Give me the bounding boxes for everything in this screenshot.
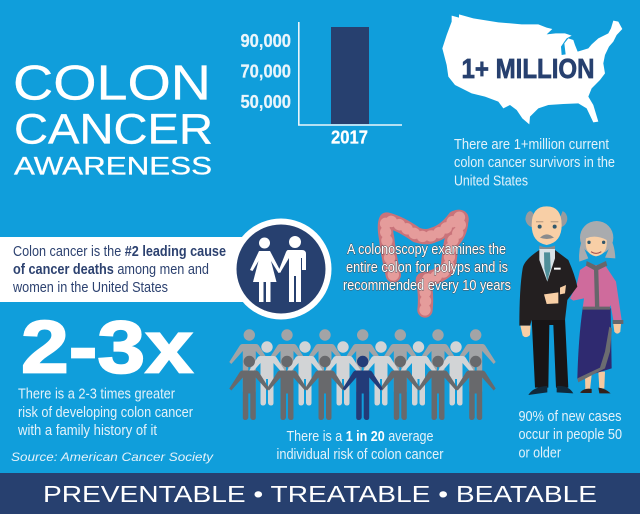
leading cause banner: women in the United States <box>12 279 168 296</box>
source: Source: American Cancer Society <box>11 450 214 464</box>
icon: woman and man <box>250 236 306 302</box>
risk text: individual risk of colon cancer <box>276 446 444 463</box>
risk text: There is a 1 in 20 average <box>286 428 434 445</box>
family history text: risk of developing colon cancer <box>18 404 193 421</box>
icon: row of people, 1 in 20 highlighted <box>229 329 496 420</box>
colon illustration <box>385 217 461 310</box>
family history text <box>17 386 193 439</box>
survivors text: There are 1+million current <box>454 136 610 153</box>
bottom banner <box>0 473 640 514</box>
title: COLON <box>13 56 211 110</box>
colonoscopy text: A colonoscopy examines the <box>347 241 506 258</box>
age text: or older <box>518 444 561 462</box>
age text: 90% of new cases <box>518 408 622 425</box>
illustration: older couple <box>519 206 623 395</box>
US map with 1+ million: 1+ MILLION <box>462 53 594 84</box>
risk text <box>276 428 444 463</box>
leading cause banner: Colon cancer is the #2 leading cause <box>13 243 226 260</box>
bar chart: cases in 2017: 70,000 <box>240 62 291 82</box>
survivors text: colon cancer survivors in the <box>454 154 615 171</box>
colonoscopy text: recommended every 10 years <box>343 277 511 294</box>
leading cause banner: of cancer deaths among men and <box>13 261 209 278</box>
title <box>13 56 213 180</box>
leading cause banner <box>0 218 332 320</box>
man <box>519 206 577 395</box>
colonoscopy text <box>343 241 511 294</box>
woman <box>570 221 623 393</box>
bar chart: cases in 2017 <box>240 22 402 148</box>
age text: occur in people 50 <box>518 426 622 443</box>
age text <box>518 408 622 462</box>
bar chart: cases in 2017: 90,000 <box>240 31 291 51</box>
title: AWARENESS <box>14 152 212 180</box>
colonoscopy text: entire colon for polyps and is <box>346 259 508 276</box>
family history text: with a family history of it <box>17 422 158 439</box>
bottom banner: PREVENTABLE • TREATABLE • BEATABLE <box>43 481 597 507</box>
bar chart: cases in 2017: 2017 <box>331 128 368 148</box>
survivors text <box>454 136 615 190</box>
2-3x statistic: 2-3x <box>21 306 193 388</box>
US map with 1+ million <box>442 14 622 124</box>
family history text: There is a 2-3 times greater <box>18 386 175 402</box>
bar chart: cases in 2017: 50,000 <box>240 92 291 112</box>
survivors text: United States <box>454 172 528 190</box>
title: CANCER <box>14 106 213 154</box>
